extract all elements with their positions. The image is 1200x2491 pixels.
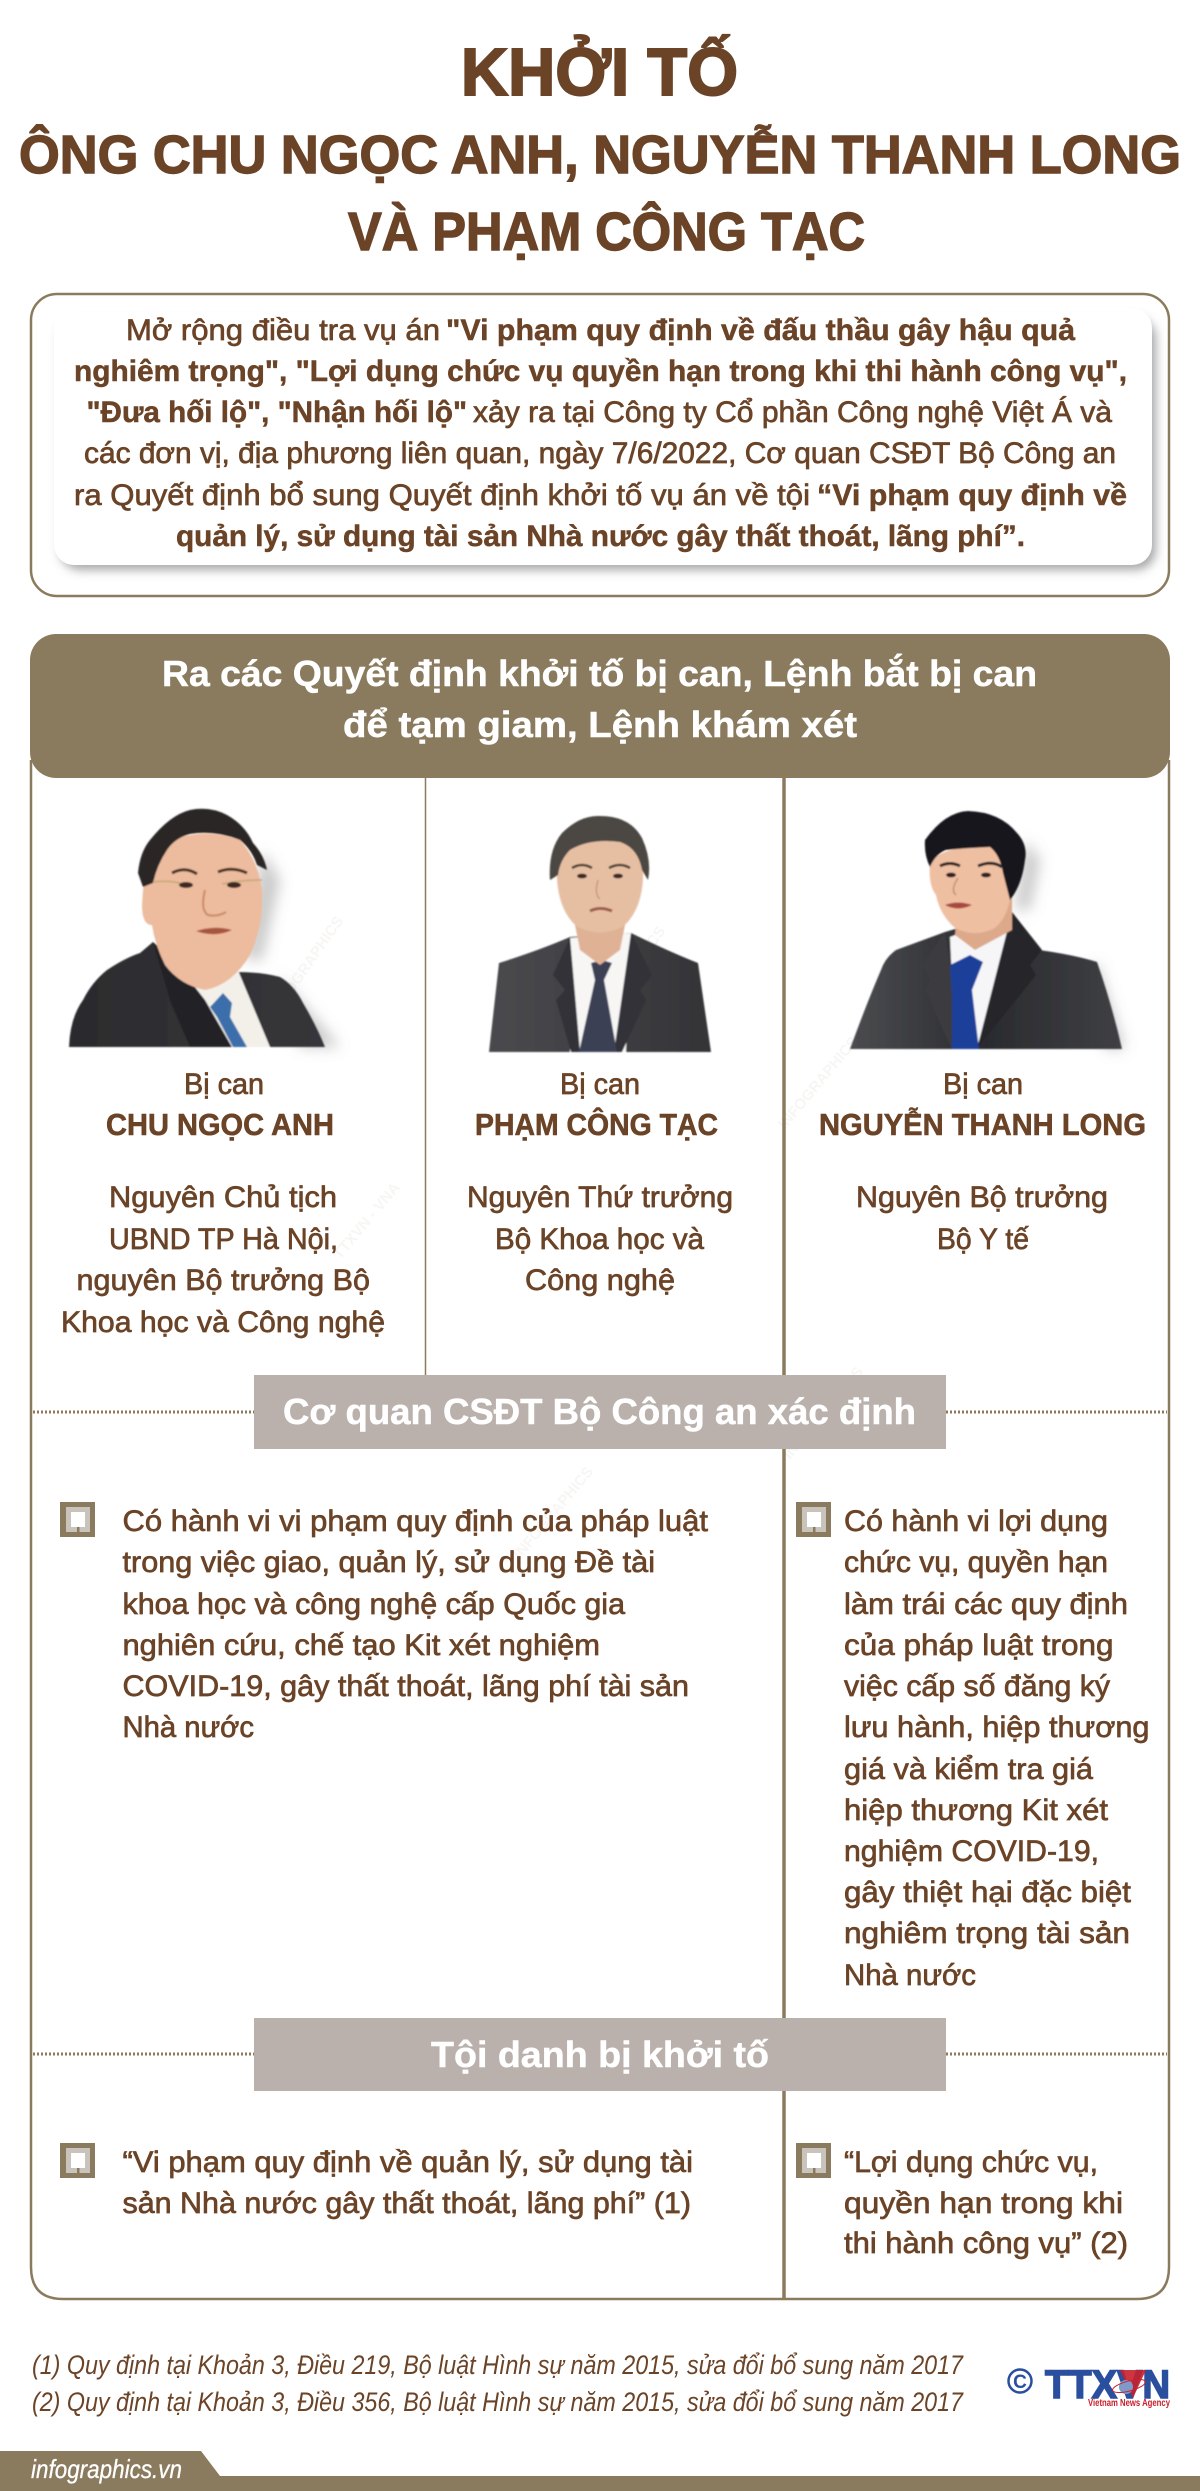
finding: right column: việc cấp số đăng ký (844, 1670, 1110, 1703)
person: Phạm Công Tạc: Công nghệ (525, 1264, 675, 1297)
title: ÔNG CHU NGỌC ANH, NGUYỄN THANH LONG (19, 124, 1181, 185)
person: Chu Ngọc Anh: nguyên Bộ trưởng Bộ (76, 1264, 370, 1297)
title: KHỞI TỐ (461, 34, 738, 110)
watermarks: INFOGRAPHICS (589, 923, 669, 1027)
panel: introduction (31, 294, 1169, 596)
logo: TTXVN: TTXVN (1045, 2363, 1170, 2407)
finding: right column: làm trái các quy định (844, 1588, 1128, 1621)
icon: bullet left 1 (60, 1502, 95, 1537)
person: Phạm Công Tạc: Bị can (560, 1068, 640, 1101)
finding: right column: Nhà nước (844, 1959, 976, 1992)
person: Chu Ngọc Anh: Khoa học và Công nghệ (61, 1306, 385, 1339)
title: VÀ PHẠM CÔNG TẠC (348, 201, 865, 262)
person: Nguyễn Thanh Long: Bộ Y tế (937, 1223, 1029, 1256)
section heading: Tội danh bị khởi tố (254, 2018, 946, 2091)
watermarks: INFOGRAPHICS (510, 1464, 597, 1563)
person: Chu Ngọc Anh: UBND TP Hà Nội, (109, 1223, 338, 1256)
intro text: quản lý, sử dụng tài sản Nhà nước gây thất thoát, lãng phí”. (176, 520, 1025, 553)
section heading: Cơ quan CSĐT Bộ Công an xác định (254, 1375, 946, 1449)
person: Chu Ngọc Anh: Nguyên Chủ tịch (109, 1181, 337, 1214)
person: Nguyễn Thanh Long (819, 1068, 1146, 1256)
finding: right column: hiệp thương Kit xét (844, 1794, 1109, 1827)
watermarks: INFOGRAPHICS (775, 1034, 862, 1133)
header banner: để tạm giam, Lệnh khám xét (343, 704, 857, 745)
charge: left column: “Vi phạm quy định về quản lý, sử dụng tài (122, 2146, 693, 2179)
finding: right column: của pháp luật trong (844, 1629, 1114, 1662)
finding: right column: nghiệm COVID-19, (844, 1835, 1099, 1868)
footnotes: (2) Quy định tại Khoản 3, Điều 356, Bộ luật Hình sự năm 2015, sửa đổi bổ sung năm 2017 (32, 2387, 964, 2417)
title (19, 34, 1181, 262)
footnotes: (1) Quy định tại Khoản 3, Điều 219, Bộ luật Hình sự năm 2015, sửa đổi bổ sung năm 2017 (32, 2350, 964, 2380)
intro text: nghiêm trọng", "Lợi dụng chức vụ quyền hạn trong khi thi hành công vụ", (74, 355, 1127, 388)
intro text: "Vi phạm quy định về đấu thầu gây hậu quả (446, 314, 1075, 347)
watermarks (267, 913, 867, 1563)
finding: left column (122, 1505, 709, 1744)
charge: right column (844, 2146, 1128, 2260)
icon: bullet right 1 (796, 1502, 831, 1537)
portrait: Chu Ngọc Anh (69, 809, 340, 1047)
person: Chu Ngọc Anh (61, 1068, 385, 1339)
charge: left column: sản Nhà nước gây thất thoát, lãng phí” (1) (122, 2187, 691, 2220)
person: Chu Ngọc Anh: CHU NGỌC ANH (106, 1107, 334, 1142)
finding: left column: trong việc giao, quản lý, sử dụng Đề tài (122, 1546, 655, 1579)
intro text (74, 314, 1127, 553)
person: Phạm Công Tạc: Bộ Khoa học và (495, 1223, 704, 1256)
finding: right column: Có hành vi lợi dụng (844, 1505, 1108, 1538)
finding: left column: COVID-19, gây thất thoát, lãng phí tài sản (122, 1670, 689, 1703)
person: Nguyễn Thanh Long: NGUYỄN THANH LONG (819, 1107, 1146, 1142)
charge: left column (122, 2146, 693, 2220)
finding: left column: khoa học và công nghệ cấp Quốc gia (122, 1588, 625, 1621)
footnotes (32, 2350, 964, 2417)
icon: bullet left 2 (60, 2143, 95, 2178)
finding: right column: giá và kiểm tra giá (844, 1753, 1093, 1786)
person: Phạm Công Tạc: Nguyên Thứ trưởng (467, 1181, 733, 1214)
person: Phạm Công Tạc (467, 1068, 733, 1297)
header banner: Ra các Quyết định khởi tố bị can, Lệnh bắt bị can (162, 652, 1037, 694)
finding: left column: Có hành vi vi phạm quy định của pháp luật (122, 1505, 709, 1538)
section heading: Cơ quan CSĐT Bộ Công an xác định: Cơ quan CSĐT Bộ Công an xác định (283, 1391, 916, 1432)
intro text: ra Quyết định bổ sung Quyết định khởi tố vụ án về tội (74, 479, 810, 512)
charge: right column: “Lợi dụng chức vụ, (844, 2146, 1098, 2179)
person: Nguyễn Thanh Long: Nguyên Bộ trưởng (856, 1181, 1108, 1214)
finding: left column: Nhà nước (122, 1711, 254, 1744)
portrait: Nguyễn Thanh Long (850, 811, 1125, 1049)
header banner (30, 634, 1170, 778)
finding: right column: nghiêm trọng tài sản (844, 1917, 1130, 1950)
finding: right column: chức vụ, quyền hạn (844, 1546, 1108, 1579)
watermarks: INFOGRAPHICS (267, 913, 347, 1017)
intro text: xảy ra tại Công ty Cổ phần Công nghệ Việt Á và (473, 396, 1112, 429)
footer bar (0, 2451, 1200, 2491)
icon: bullet right 2 (796, 2143, 831, 2178)
footer bar: infographics.vn (31, 2454, 182, 2484)
finding: right column: lưu hành, hiệp thương (844, 1711, 1150, 1744)
portrait: Phạm Công Tạc (489, 816, 711, 1052)
intro text: "Đưa hối lộ", "Nhận hối lộ" (86, 396, 467, 429)
watermarks: TTXVN - VNA (330, 1179, 404, 1263)
person: Chu Ngọc Anh: Bị can (184, 1068, 264, 1101)
intro text: các đơn vị, địa phương liên quan, ngày 7/6/2022, Cơ quan CSĐT Bộ Công an (84, 437, 1116, 470)
finding: right column: gây thiệt hại đặc biệt (844, 1876, 1132, 1909)
finding: left column: nghiên cứu, chế tạo Kit xét nghiệm (122, 1629, 600, 1662)
section heading: Tội danh bị khởi tố: Tội danh bị khởi tố (431, 2034, 769, 2075)
panel: main frame (31, 760, 1169, 2299)
intro text: Mở rộng điều tra vụ án (126, 314, 440, 347)
person: Nguyễn Thanh Long: Bị can (943, 1068, 1023, 1101)
logo: TTXVN: Vietnam News Agency (1088, 2397, 1170, 2409)
person: Phạm Công Tạc: PHẠM CÔNG TẠC (475, 1106, 718, 1142)
charge: right column: thi hành công vụ” (2) (844, 2227, 1128, 2260)
logo: TTXVN: C (1013, 2372, 1027, 2393)
watermarks: INFOGRAPHICS (780, 1364, 867, 1463)
charge: right column: quyền hạn trong khi (844, 2187, 1123, 2220)
finding: right column (844, 1505, 1150, 1992)
intro text: “Vi phạm quy định về (817, 479, 1127, 512)
